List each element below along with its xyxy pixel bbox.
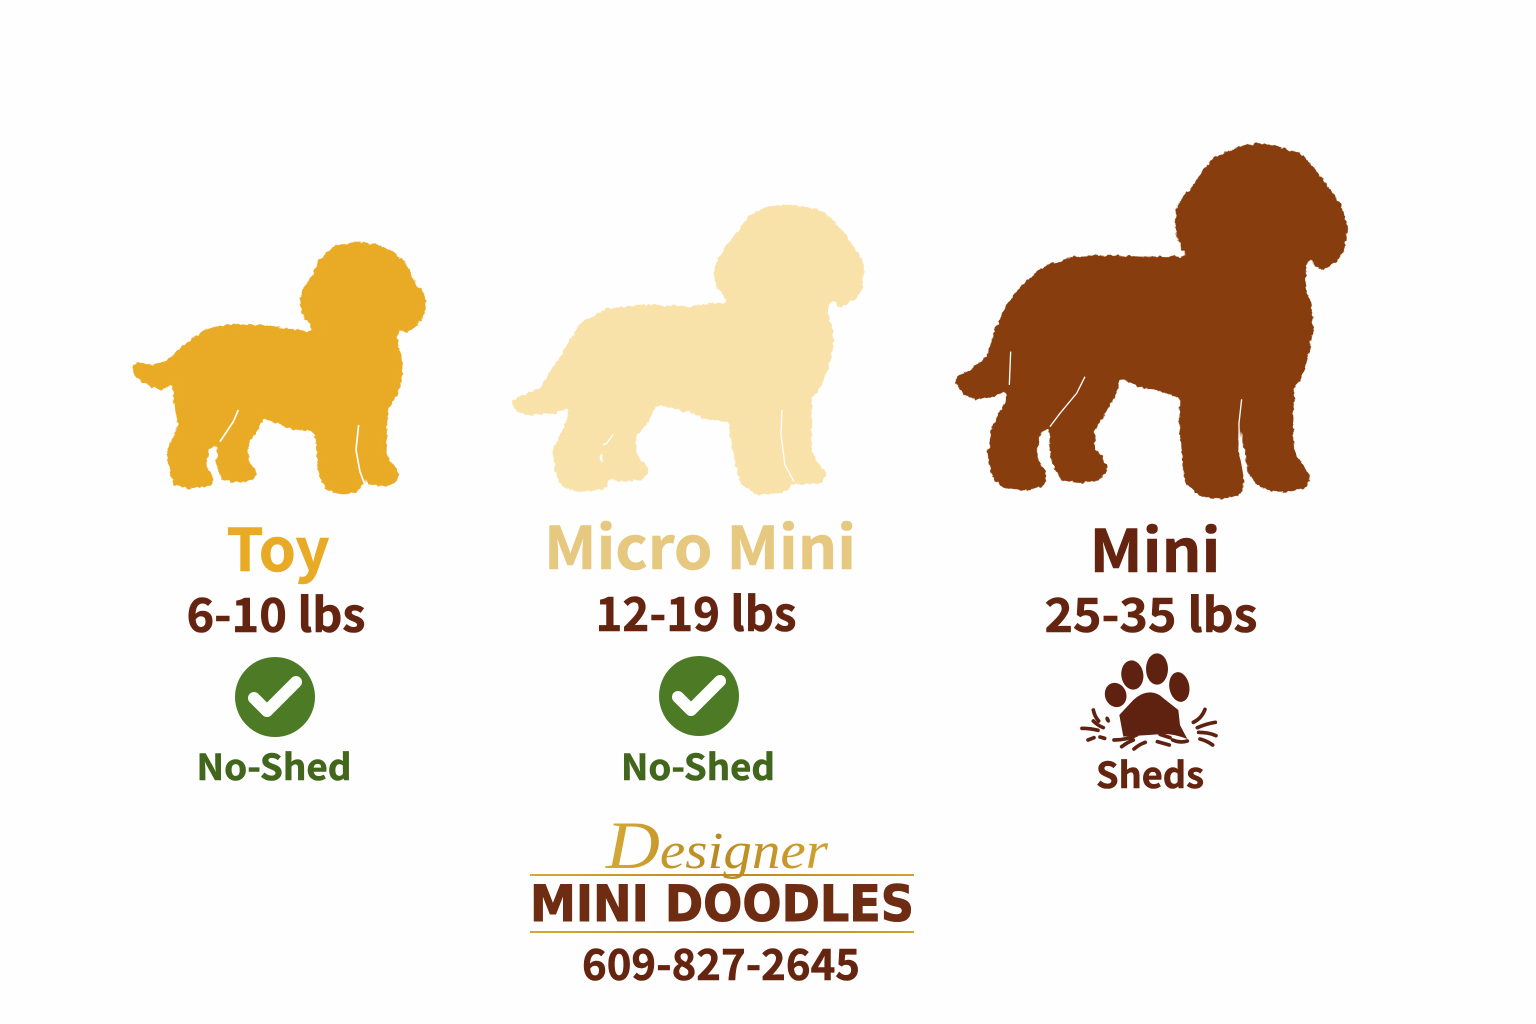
icon: mini dog silhouette bbox=[953, 143, 1347, 499]
icon: green check badge bbox=[235, 657, 315, 737]
panel: Mini bbox=[953, 143, 1347, 799]
label: Micro Mini: Micro Mini bbox=[544, 501, 856, 586]
panel: Toy bbox=[132, 242, 426, 791]
logo wordmark: MINI DOODLES: MINI DOODLES bbox=[530, 875, 914, 933]
icon: micro mini dog silhouette bbox=[510, 204, 865, 495]
label: Toy: Toy bbox=[226, 503, 330, 588]
icon: toy dog silhouette bbox=[132, 242, 426, 495]
label: Sheds: Sheds bbox=[1096, 747, 1204, 799]
panel: Micro Mini bbox=[510, 204, 865, 791]
phone number: 609-827-2645 bbox=[582, 931, 860, 993]
rule: upper gold bbox=[530, 874, 914, 876]
weight: 25-35 lbs: 25-35 lbs bbox=[1044, 577, 1258, 646]
weight: 6-10 lbs: 6-10 lbs bbox=[186, 577, 366, 646]
weight: 12-19 lbs: 12-19 lbs bbox=[596, 576, 796, 645]
icon: green check badge bbox=[659, 656, 739, 736]
rule: lower gold bbox=[530, 931, 914, 933]
label: No-Shed: No-Shed bbox=[621, 739, 775, 791]
icon: shedding paw bbox=[1082, 653, 1216, 749]
label: No-Shed: No-Shed bbox=[196, 739, 352, 791]
logo script: Designer: Designer bbox=[605, 807, 829, 883]
logo: Designer Mini Doodles bbox=[530, 807, 914, 993]
label: Mini: Mini bbox=[1090, 504, 1220, 589]
